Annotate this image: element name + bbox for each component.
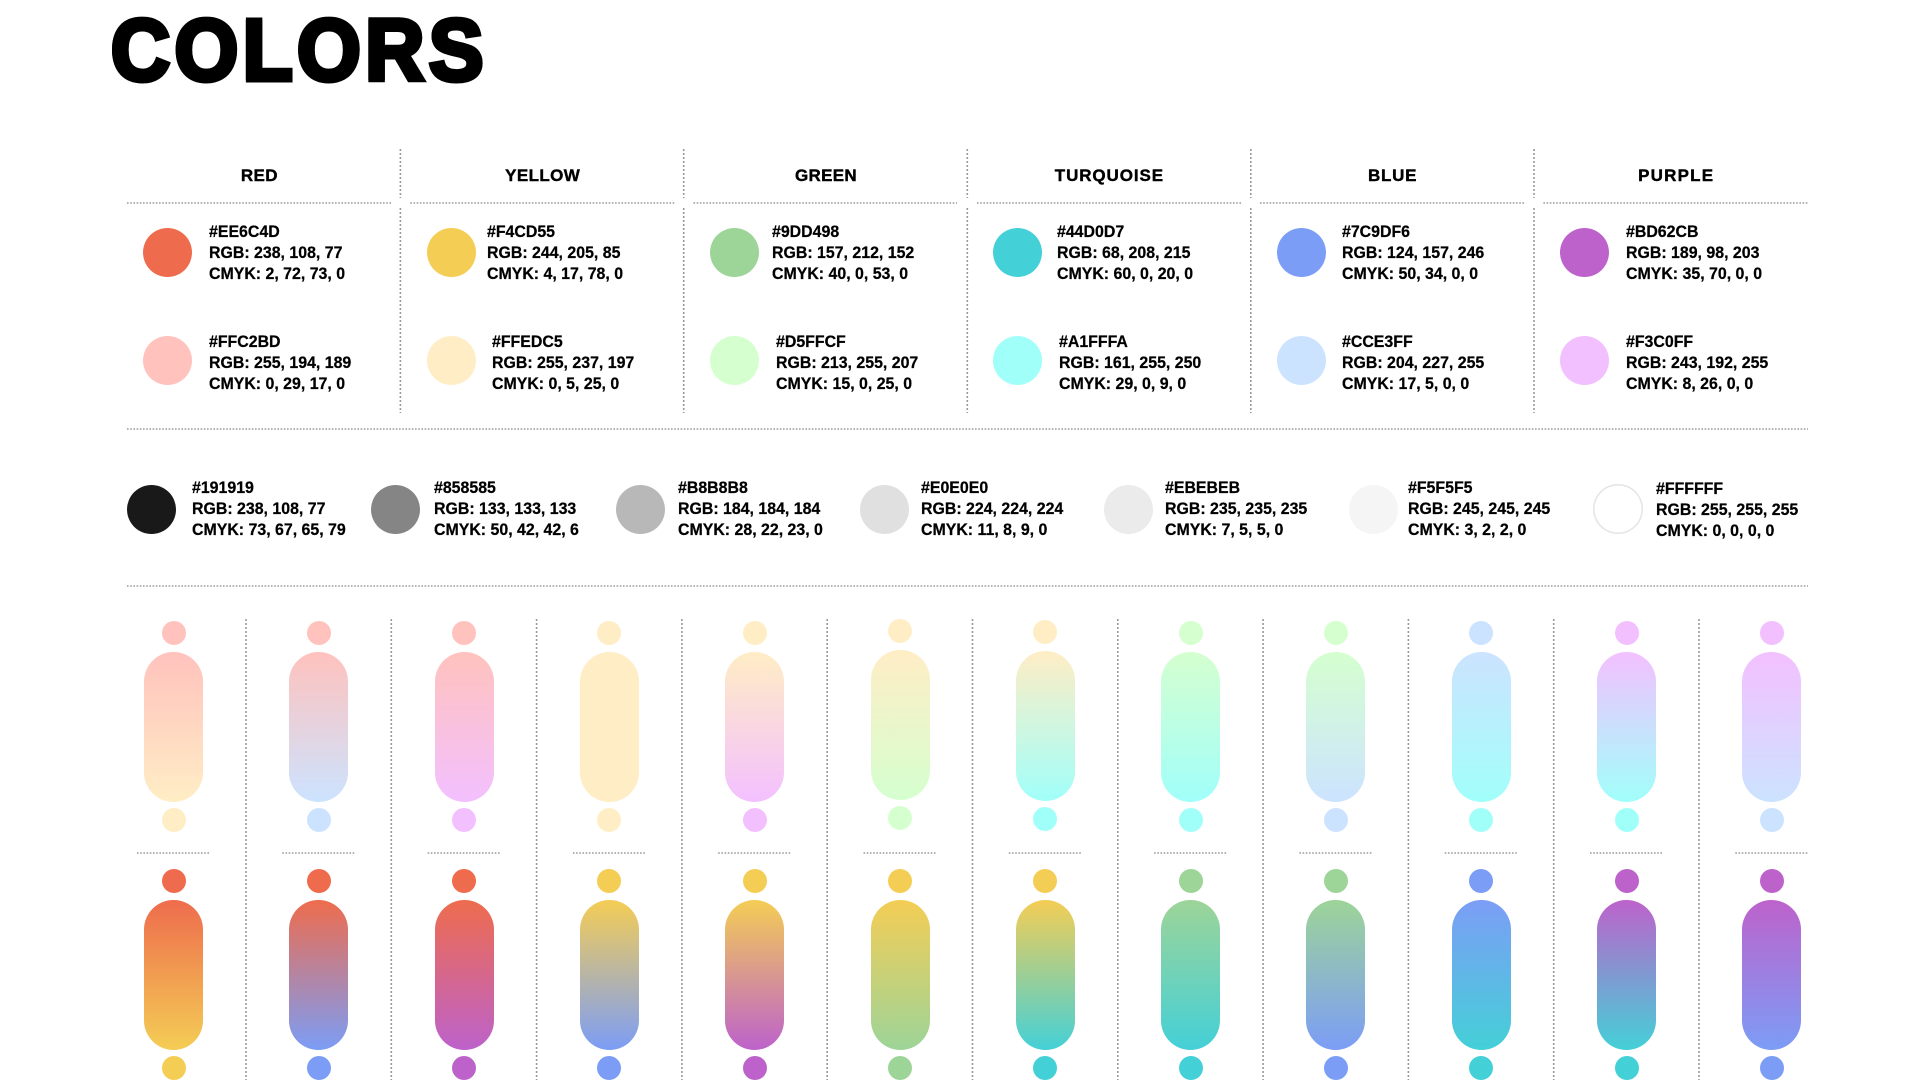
vivid gradient 7: yellow to turquoise	[1016, 869, 1075, 1080]
text: paler gray values: CMYK: 7, 5, 5, 0	[1165, 520, 1283, 539]
text: green values: RGB: 157, 212, 152	[772, 243, 914, 262]
text: palest gray values: #F5F5F5	[1408, 478, 1473, 497]
text: medium gray values: CMYK: 28, 22, 23, 0	[678, 520, 823, 539]
text: black values: RGB: 238, 108, 77	[192, 499, 325, 518]
text: black values	[192, 478, 346, 539]
swatch: light green	[710, 336, 759, 385]
swatch: turquoise	[993, 228, 1042, 277]
tint gradient 9: green to blue	[1306, 621, 1365, 832]
tint gradient 7: yellow to turquoise	[1016, 620, 1075, 831]
text: palest gray values	[1408, 478, 1550, 539]
swatch: yellow	[427, 228, 476, 277]
tint gradient 4: yellow	[580, 621, 639, 832]
text: light blue values: RGB: 204, 227, 255	[1342, 353, 1484, 372]
text: dark gray values: CMYK: 50, 42, 42, 6	[434, 520, 579, 539]
tint gradient 11: purple to turquoise	[1597, 621, 1656, 832]
text: light red values: CMYK: 0, 29, 17, 0	[209, 374, 345, 393]
vivid gradient 1: red to yellow	[144, 869, 203, 1080]
text: medium gray values: #B8B8B8	[678, 478, 747, 497]
text: medium gray values	[678, 478, 823, 539]
text: light purple values: RGB: 243, 192, 255	[1626, 353, 1768, 372]
text: paler gray values	[1165, 478, 1307, 539]
text: blue values: RGB: 124, 157, 246	[1342, 243, 1484, 262]
swatch: red	[143, 228, 192, 277]
text: light turquoise values: CMYK: 29, 0, 9, 0	[1059, 374, 1186, 393]
text: medium gray values: RGB: 184, 184, 184	[678, 499, 820, 518]
text: light gray values: RGB: 224, 224, 224	[921, 499, 1063, 518]
text: dark gray values	[434, 478, 579, 539]
text: white values: RGB: 255, 255, 255	[1656, 500, 1799, 519]
text: light red values	[209, 332, 352, 393]
text: red values: CMYK: 2, 72, 73, 0	[209, 264, 345, 283]
text: blue values: #7C9DF6	[1342, 222, 1410, 241]
title: COLORS	[111, 2, 488, 98]
text: light purple values: #F3C0FF	[1626, 332, 1693, 351]
tint gradient 8: green to turquoise	[1161, 621, 1220, 832]
text: purple values: #BD62CB	[1626, 222, 1698, 241]
text: red values: RGB: 238, 108, 77	[209, 243, 343, 262]
text: light yellow values	[492, 332, 634, 393]
text: light purple values	[1626, 332, 1768, 393]
text: black values: #191919	[192, 478, 254, 497]
swatch: blue	[1277, 228, 1326, 277]
vivid gradient 3: red to purple	[435, 869, 494, 1080]
text: light yellow values: #FFEDC5	[492, 332, 563, 351]
swatch: paler gray	[1104, 484, 1153, 534]
text: light green values: #D5FFCF	[776, 332, 845, 351]
text: green values: #9DD498	[772, 222, 839, 241]
text: light turquoise values	[1059, 332, 1201, 393]
vivid gradient 5: yellow to purple	[725, 869, 784, 1080]
text: turquoise values: RGB: 68, 208, 215	[1057, 243, 1191, 262]
tint gradient 12: purple to blue	[1742, 621, 1801, 832]
text: light blue values: CMYK: 17, 5, 0, 0	[1342, 374, 1469, 393]
text: light turquoise values: #A1FFFA	[1059, 332, 1128, 351]
text: white values: #FFFFFF	[1656, 479, 1723, 498]
text: blue values: CMYK: 50, 34, 0, 0	[1342, 264, 1478, 283]
heading: red: RED	[241, 166, 278, 185]
vivid gradient 12: purple to blue	[1742, 869, 1801, 1080]
swatch: light blue	[1277, 336, 1326, 385]
text: light blue values: #CCE3FF	[1342, 332, 1412, 351]
text: red values	[209, 222, 345, 283]
swatch: purple	[1560, 228, 1609, 277]
swatch: dark gray	[371, 484, 420, 534]
heading: green: GREEN	[795, 166, 857, 185]
text: purple values: CMYK: 35, 70, 0, 0	[1626, 264, 1762, 283]
text: palest gray values: CMYK: 3, 2, 2, 0	[1408, 520, 1527, 539]
vivid gradient 11: purple to turquoise	[1597, 869, 1656, 1080]
text: light green values: RGB: 213, 255, 207	[776, 353, 918, 372]
text: white values	[1656, 479, 1799, 540]
text: palest gray values: RGB: 245, 245, 245	[1408, 499, 1550, 518]
text: light yellow values: CMYK: 0, 5, 25, 0	[492, 374, 619, 393]
swatch: palest gray	[1349, 484, 1398, 534]
tint gradient 10: blue to turquoise	[1452, 621, 1511, 832]
text: light green values: CMYK: 15, 0, 25, 0	[776, 374, 912, 393]
heading: yellow: YELLOW	[505, 166, 580, 185]
text: green values: CMYK: 40, 0, 53, 0	[772, 264, 908, 283]
swatch: light purple	[1560, 336, 1609, 385]
swatch: black	[127, 484, 176, 534]
text: yellow values: #F4CD55	[487, 222, 555, 241]
text: paler gray values: #EBEBEB	[1165, 478, 1240, 497]
tint gradient 6: yellow to green	[871, 619, 930, 830]
text: light gray values: #E0E0E0	[921, 478, 988, 497]
text: yellow values	[487, 222, 623, 283]
swatch: light gray	[860, 484, 909, 534]
vivid gradient 8: green to turquoise	[1161, 869, 1220, 1080]
heading: blue: BLUE	[1368, 166, 1417, 185]
vivid gradient 4: yellow to blue	[580, 869, 639, 1080]
swatch: green	[710, 228, 759, 277]
tint gradient 5: yellow to purple	[725, 621, 784, 832]
text: turquoise values: CMYK: 60, 0, 20, 0	[1057, 264, 1193, 283]
vivid gradient 6: yellow to green	[871, 869, 930, 1080]
vivid gradient 9: green to blue	[1306, 869, 1365, 1080]
swatch: medium gray	[616, 484, 665, 534]
text: light gray values: CMYK: 11, 8, 9, 0	[921, 520, 1047, 539]
tint gradient 3: red to purple	[435, 621, 494, 832]
heading: turquoise: TURQUOISE	[1055, 166, 1164, 185]
text: light gray values	[921, 478, 1064, 539]
text: yellow values: CMYK: 4, 17, 78, 0	[487, 264, 623, 283]
text: light green values	[776, 332, 918, 393]
tint gradient 1: red to yellow	[144, 621, 203, 832]
swatch: light turquoise	[993, 336, 1042, 385]
text: yellow values: RGB: 244, 205, 85	[487, 243, 620, 262]
text: light yellow values: RGB: 255, 237, 197	[492, 353, 634, 372]
text: light red values: RGB: 255, 194, 189	[209, 353, 352, 372]
swatch: white	[1592, 484, 1642, 534]
text: dark gray values: RGB: 133, 133, 133	[434, 499, 576, 518]
text: blue values	[1342, 222, 1484, 283]
swatch: light red	[143, 336, 192, 385]
swatch: light yellow	[427, 336, 476, 385]
text: paler gray values: RGB: 235, 235, 235	[1165, 499, 1307, 518]
text: white values: CMYK: 0, 0, 0, 0	[1656, 521, 1775, 540]
text: purple values	[1626, 222, 1762, 283]
text: light blue values	[1342, 332, 1484, 393]
heading: purple: PURPLE	[1638, 166, 1714, 185]
text: turquoise values	[1057, 222, 1193, 283]
text: black values: CMYK: 73, 67, 65, 79	[192, 520, 346, 539]
text: green values	[772, 222, 914, 283]
text: light red values: #FFC2BD	[209, 332, 281, 351]
vivid gradient 10: blue to turquoise	[1452, 869, 1511, 1080]
vivid gradient 2: red to blue	[289, 869, 348, 1080]
tint gradient 2: red to blue	[289, 621, 348, 832]
text: dark gray values: #858585	[434, 478, 496, 497]
text: purple values: RGB: 189, 98, 203	[1626, 243, 1759, 262]
text: red values: #EE6C4D	[209, 222, 280, 241]
text: light turquoise values: RGB: 161, 255, 250	[1059, 353, 1201, 372]
text: turquoise values: #44D0D7	[1057, 222, 1125, 241]
text: light purple values: CMYK: 8, 26, 0, 0	[1626, 374, 1753, 393]
